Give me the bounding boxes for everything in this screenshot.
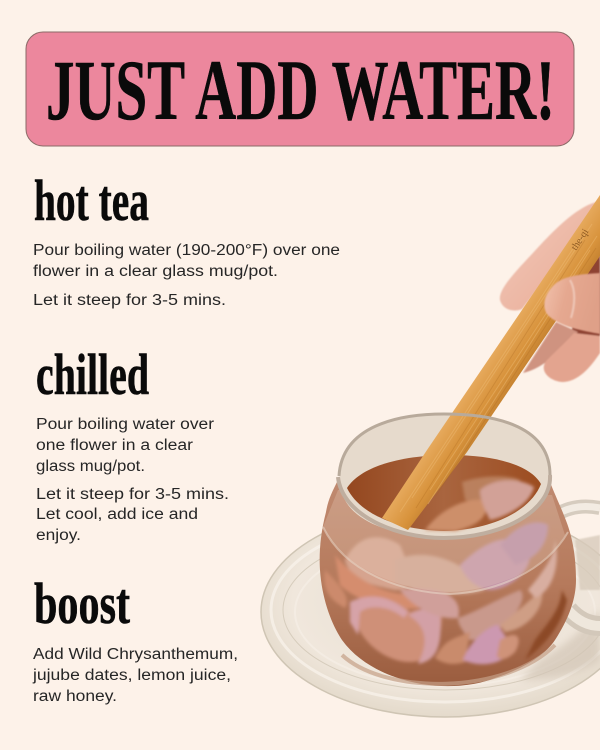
- text: chilled instructions: one flower in a clear: [36, 437, 193, 454]
- icon: bamboo stick: [382, 195, 600, 530]
- text: chilled instructions: glass mug/pot.: [36, 458, 145, 475]
- text: hot tea instructions: flower in a clear glass mug/pot.: [33, 263, 278, 280]
- mug front lip: [338, 475, 550, 538]
- section: chilled: [36, 342, 229, 544]
- photo: glass mug of flower tea on saucer: [261, 195, 600, 717]
- icon: rose petals in tea: [324, 522, 567, 664]
- section: hot tea: [33, 168, 340, 309]
- text: chilled instructions: Let it steep for 3-5 mins.: [36, 486, 229, 503]
- inside of glass above the tea: [340, 414, 550, 537]
- icon: mug handle: [556, 507, 600, 626]
- text: boost instructions: jujube dates, lemon juice,: [32, 667, 231, 684]
- petals at tea surface: [425, 476, 534, 531]
- stick brand mark: the-qi: [569, 227, 591, 253]
- shadow behind fingers: [570, 240, 600, 350]
- hand behind the stick: [500, 202, 600, 382]
- text: boost instructions: [32, 646, 238, 705]
- text: hot tea instructions: [33, 242, 340, 309]
- text: chilled instructions: Let cool, add ice and: [36, 506, 198, 523]
- heading: chilled: chilled: [36, 342, 149, 407]
- glass band highlight: [323, 490, 565, 592]
- lower palm: [523, 322, 578, 373]
- index finger: [500, 202, 600, 310]
- icon: mug body with tea: [320, 414, 576, 686]
- heading: hot tea: hot tea: [34, 168, 149, 233]
- text: hot tea instructions: Pour boiling water (190-200°F) over one: [33, 242, 340, 259]
- text: chilled instructions: enjoy.: [36, 527, 81, 544]
- ring finger: [544, 333, 600, 382]
- title banner: [26, 32, 574, 146]
- section: boost: [32, 571, 238, 705]
- text: chilled instructions: Pour boiling water over: [36, 416, 214, 433]
- text: boost instructions: raw honey.: [33, 688, 117, 705]
- text: hot tea instructions: Let it steep for 3-5 mins.: [33, 292, 226, 309]
- text: chilled instructions: [36, 416, 229, 544]
- tea surface: [347, 455, 541, 531]
- icon: glass saucer: [261, 507, 600, 717]
- heading: boost: boost: [34, 571, 130, 636]
- text: boost instructions: Add Wild Chrysanthemum,: [33, 646, 238, 663]
- icon: thumb: [544, 273, 600, 334]
- mug back rim: [339, 414, 550, 476]
